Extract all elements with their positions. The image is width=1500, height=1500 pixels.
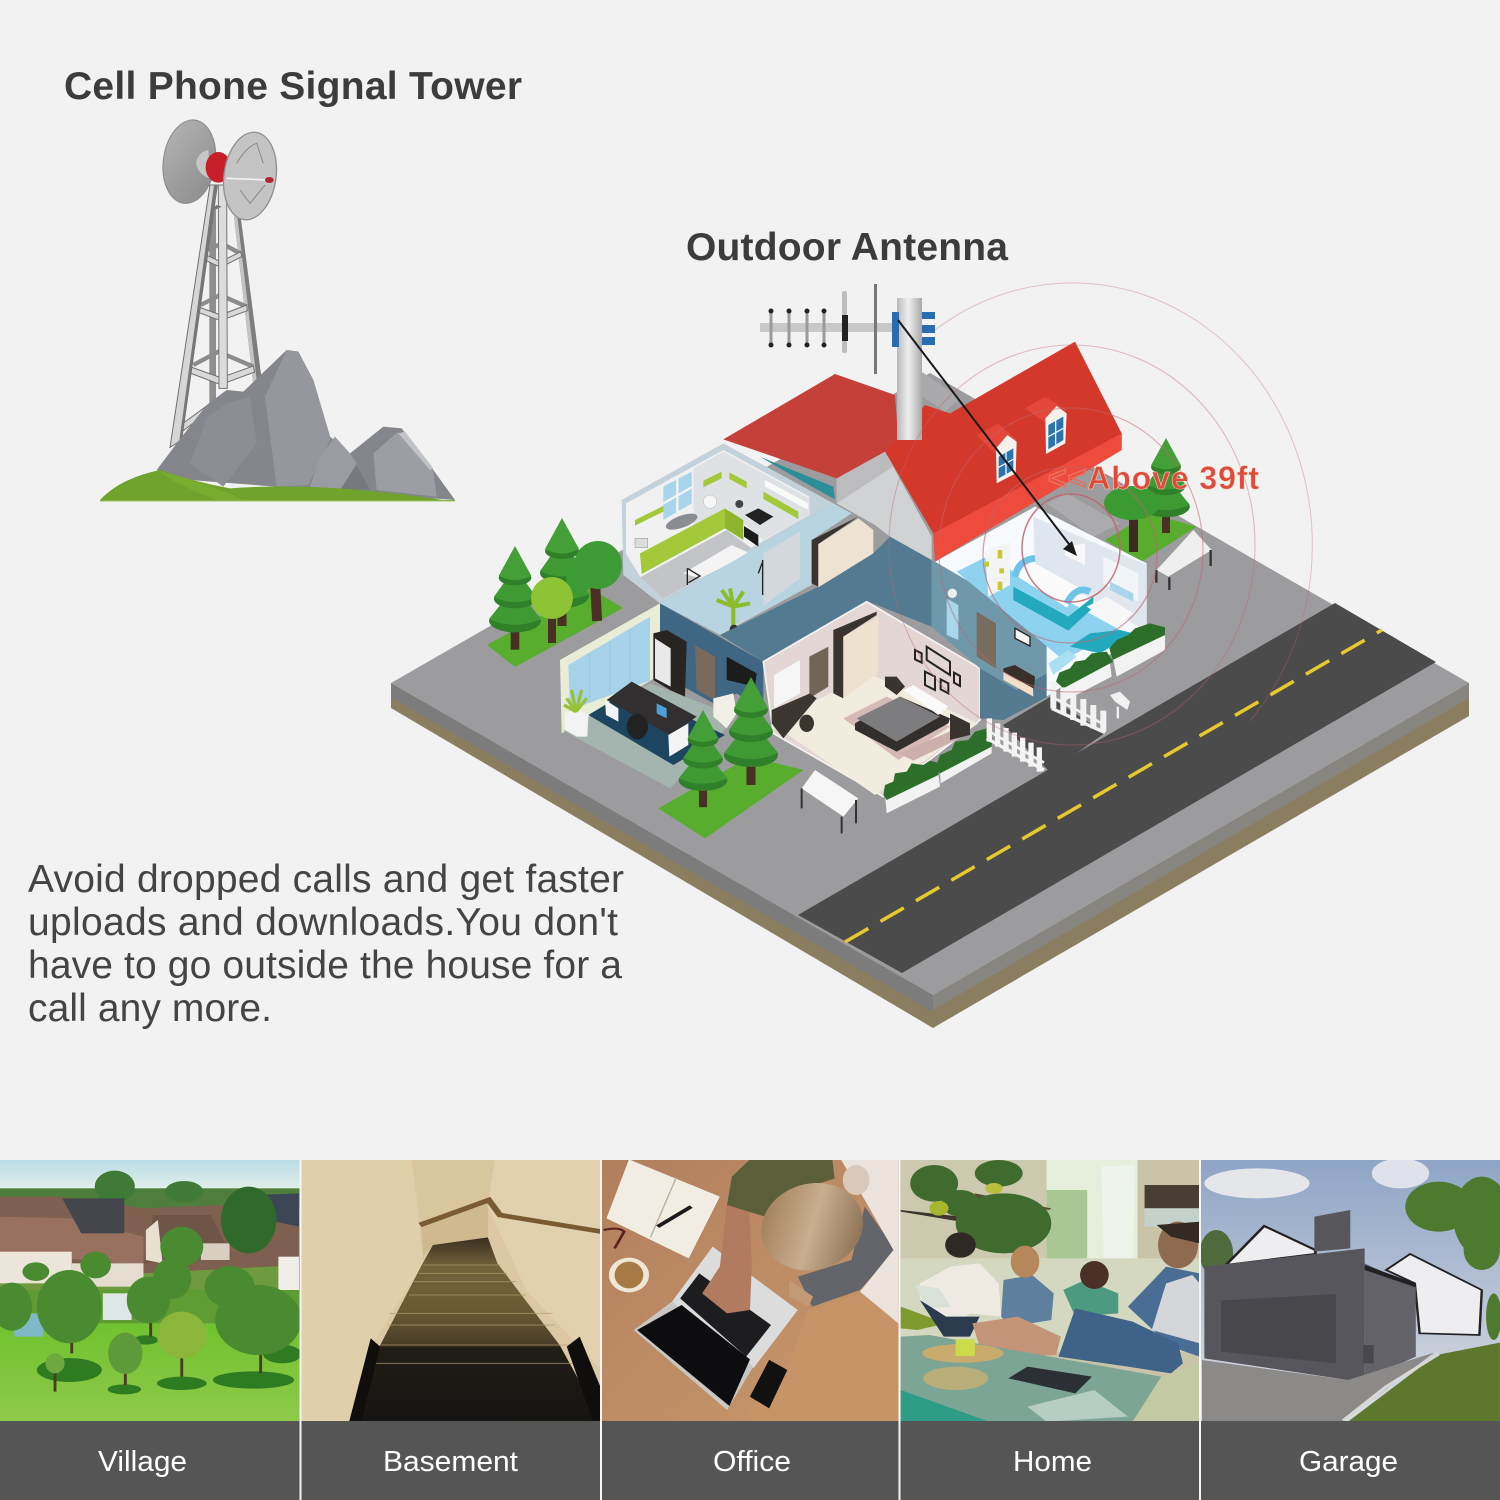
panel: Garage photo — [1200, 1157, 1500, 1423]
dormer window 2 — [1045, 406, 1067, 454]
left lawn and trees — [487, 518, 623, 667]
front planters — [883, 728, 993, 813]
bedroom outer wall — [932, 560, 1047, 720]
label: Office: Office — [713, 1446, 791, 1478]
left dish — [158, 116, 221, 207]
front fence — [987, 718, 1044, 772]
arrow: antenna to indoor — [898, 320, 1077, 556]
caption bars — [0, 1421, 1500, 1500]
rear pine — [1142, 438, 1190, 533]
bedroom — [763, 602, 980, 797]
panel: Village photo — [0, 1157, 301, 1423]
tower lattice — [170, 185, 261, 447]
kids bedroom and right roof — [885, 342, 1165, 733]
description text — [28, 858, 624, 1030]
illustration: signal tower on mountain — [100, 116, 455, 501]
kids-room planters — [1056, 623, 1165, 702]
title: Cell Phone Signal Tower: Cell Phone Signal Tower — [64, 65, 522, 108]
callout: Above 39ft: <<Above 39ft — [1048, 460, 1259, 496]
description text: uploads and downloads.You don't — [28, 901, 618, 944]
yagi antenna — [760, 284, 935, 374]
large blue wall — [720, 537, 932, 662]
kitchen room — [622, 443, 833, 603]
teal room behind roof — [760, 457, 835, 499]
hall — [660, 503, 852, 635]
wall door and fixtures — [947, 589, 1035, 697]
panel dividers — [300, 1160, 1201, 1500]
mountain — [157, 350, 455, 500]
label: Village: Village — [98, 1446, 187, 1478]
green hill — [100, 470, 455, 501]
illustration: isometric house on platform — [391, 283, 1469, 1028]
right dish — [218, 129, 282, 223]
front bench — [802, 770, 858, 833]
label: Garage: Garage — [1299, 1446, 1398, 1478]
right big roof — [885, 342, 1122, 562]
description text: call any more. — [28, 987, 272, 1030]
back lawn and trees — [1105, 513, 1212, 590]
description text: Avoid dropped calls and get faster — [28, 858, 624, 901]
gable wall — [837, 452, 932, 562]
front pine right — [724, 677, 778, 785]
dormer window 1 — [996, 435, 1017, 483]
antenna pole — [897, 298, 922, 440]
office rear wall — [660, 603, 763, 710]
platform base — [391, 373, 1469, 1028]
rear round tree — [1104, 486, 1160, 552]
panel: Home photo — [899, 1157, 1201, 1423]
red hub — [206, 152, 231, 183]
heading: Outdoor Antenna: Outdoor Antenna — [686, 226, 1008, 269]
road — [798, 603, 1436, 973]
label: Basement: Basement — [383, 1446, 518, 1478]
office — [560, 603, 757, 788]
right-side patio — [1047, 493, 1120, 537]
kids room — [935, 507, 1147, 697]
panel: Basement photo — [300, 1157, 602, 1423]
label: Home: Home — [1013, 1446, 1092, 1478]
panel: Office photo — [600, 1157, 906, 1423]
front lawn — [658, 757, 803, 838]
house interior and roof — [560, 374, 1047, 838]
chimney base — [920, 372, 960, 412]
front pines — [679, 710, 727, 807]
wardrobe — [812, 517, 873, 587]
description text: have to go outside the house for a — [28, 944, 622, 987]
signal rings — [889, 283, 1312, 745]
left main roof — [723, 374, 898, 478]
rear fence and mailbox — [1052, 682, 1130, 733]
